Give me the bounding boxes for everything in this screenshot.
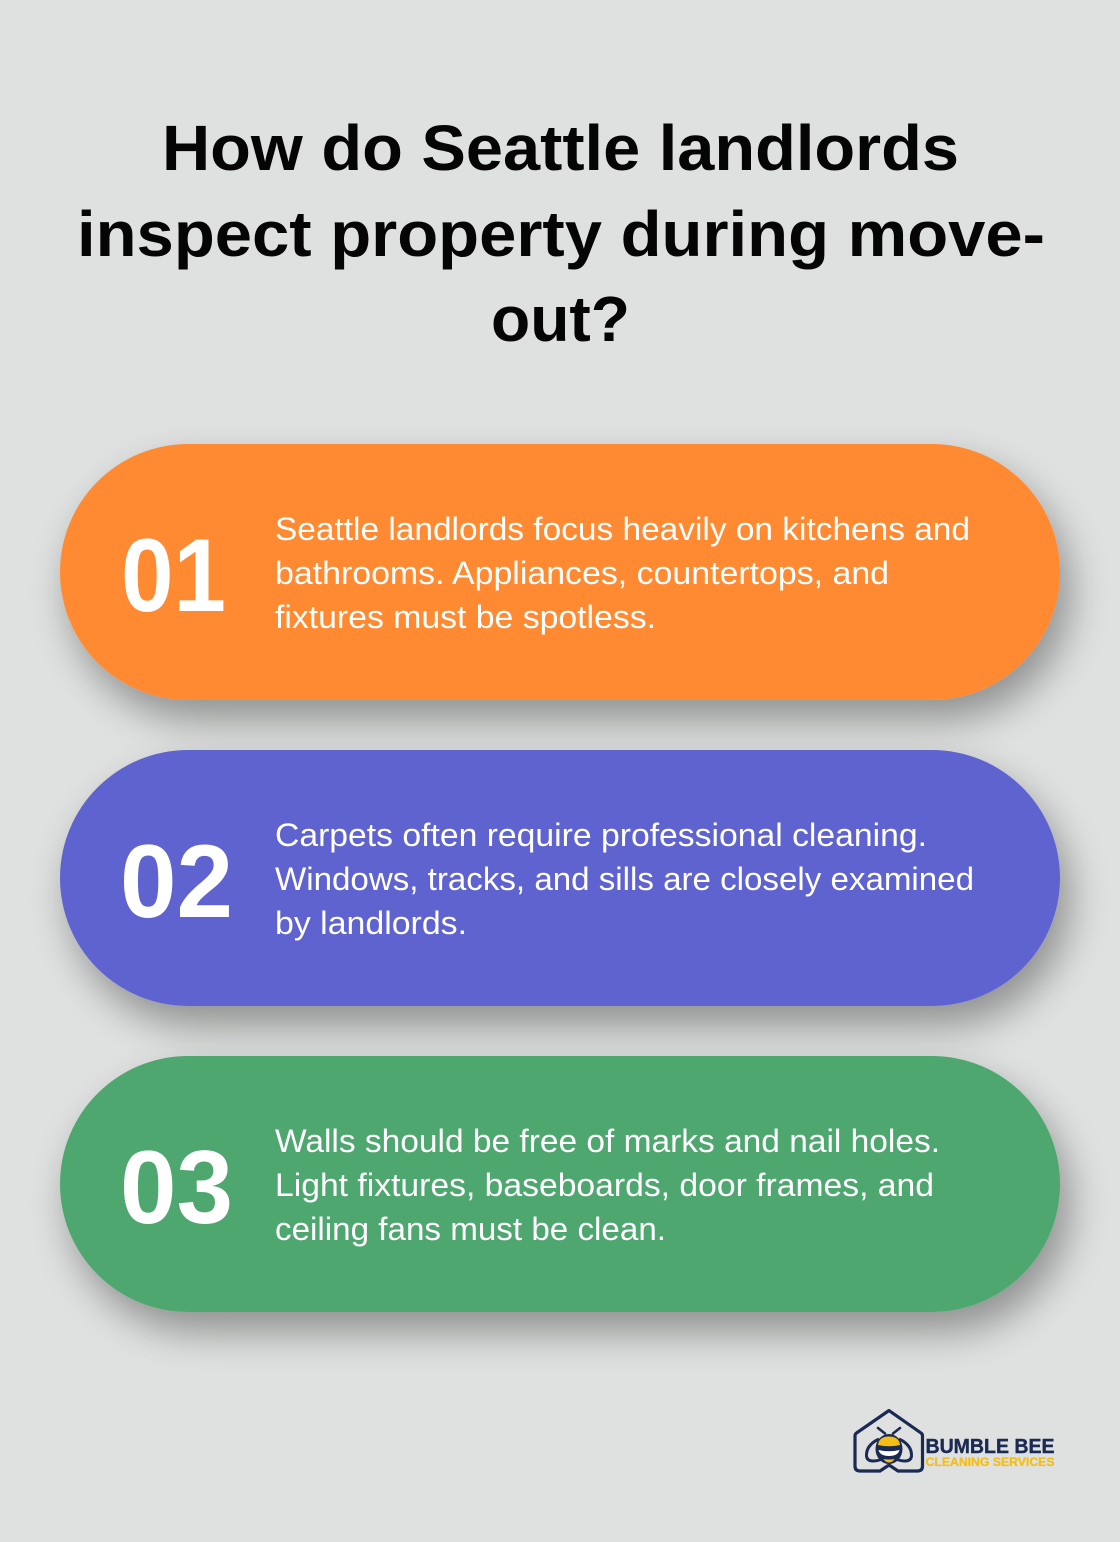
text: logo wordmark: BUMBLE BEE (926, 1436, 1054, 1458)
icon: house with bee (855, 1410, 922, 1471)
panel: step 03 walls and fixtures (60, 1056, 1060, 1312)
text: step 03 description (275, 1123, 940, 1247)
text: step 02 description: Windows, tracks, and sills are closely examined (275, 861, 974, 897)
text: step 01 description (275, 511, 970, 635)
title: out? (491, 283, 630, 355)
text: logo wordmark: CLEANING SERVICES (926, 1455, 1054, 1469)
text: step 03 description: Walls should be free of marks and nail holes. (275, 1123, 940, 1159)
text: step 02 description: Carpets often require professional cleaning. (275, 817, 927, 853)
title: inspect property during move- (77, 198, 1045, 270)
logo: Bumble Bee Cleaning Services (855, 1410, 1054, 1471)
number 01: 01 (121, 518, 226, 634)
number 02: 02 (120, 824, 233, 940)
number 03: 03 (120, 1130, 233, 1246)
text: step 02 description: by landlords. (275, 905, 467, 941)
panel: step 01 kitchens and bathrooms (60, 444, 1060, 700)
text: logo wordmark (926, 1436, 1054, 1469)
panel: step 02 carpets and windows (60, 750, 1060, 1006)
title (77, 112, 1045, 355)
text: step 01 description: Seattle landlords focus heavily on kitchens and (275, 511, 970, 547)
text: step 01 description: bathrooms. Appliances, countertops, and (275, 555, 889, 591)
text: step 01 description: fixtures must be spotless. (275, 599, 656, 635)
text: step 02 description (275, 817, 974, 941)
text: step 03 description: ceiling fans must be clean. (275, 1211, 666, 1247)
text: step 03 description: Light fixtures, baseboards, door frames, and (275, 1167, 934, 1203)
title: How do Seattle landlords (162, 112, 959, 184)
